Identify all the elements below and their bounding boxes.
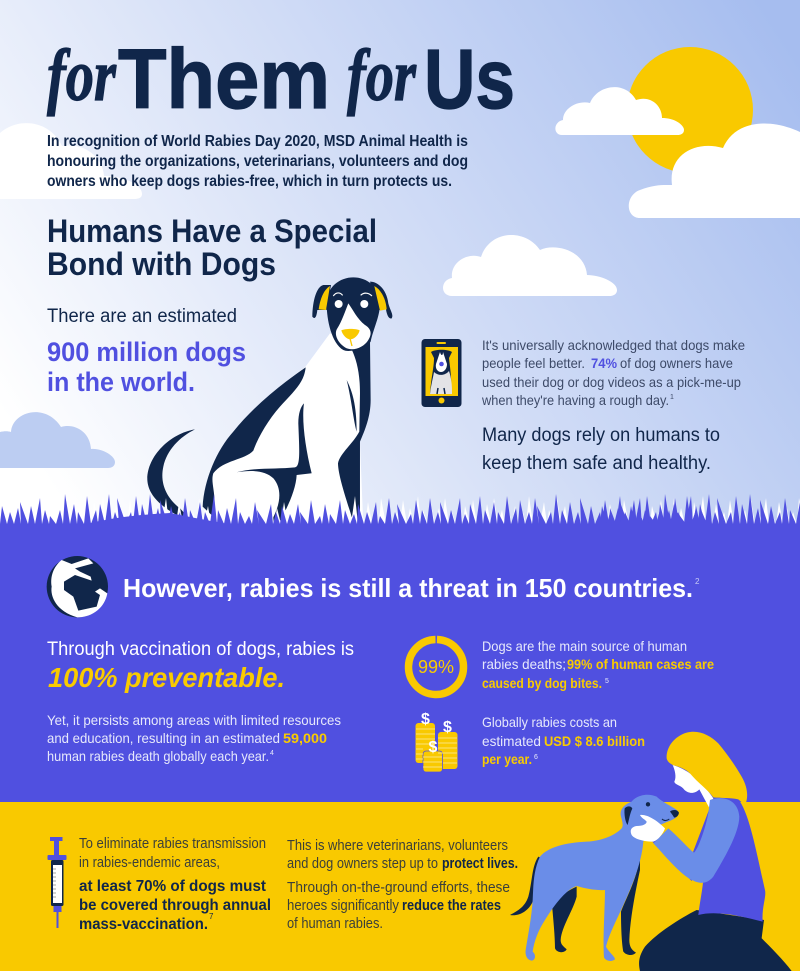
grass: white blades (0, 496, 800, 536)
icon: coins (416, 711, 458, 772)
stat: 900 million dogs: 900 million dogs (47, 337, 246, 367)
woman: legs (639, 910, 792, 971)
text: protect lives: of human rabies. (287, 915, 383, 932)
stat: 900 million dogs (47, 337, 246, 397)
panel: sky background (0, 0, 800, 540)
icon: globe (47, 556, 108, 617)
text: cost (482, 714, 645, 767)
text: protect lives: This is where veterinarians, volunteers (287, 837, 508, 854)
dog: body (526, 795, 678, 961)
dog: far legs (552, 887, 577, 952)
intro text: In recognition of World Rabies Day 2020, MSD Animal Health is (47, 133, 468, 150)
text: dogs make people feel better: It's universally acknowledged that dogs make (482, 337, 745, 353)
title: for (47, 35, 117, 117)
text: protect lives: heroes significantly (287, 897, 399, 914)
text: dogs make people feel better: when they're having a rough day. (481, 392, 669, 408)
intro text (47, 133, 468, 190)
text: eliminate rabies: in rabies-endemic areas, (79, 854, 220, 871)
heading: rabies threat: However, rabies is still a threat in 150 countries. (123, 573, 693, 603)
icon: coins: $ (443, 719, 452, 736)
text: dogs make people feel better: people feel better. (482, 355, 585, 371)
woman: torso (690, 798, 765, 922)
text: cost: USD $ 8.6 billion (544, 733, 645, 749)
text: persists: human rabies death globally each year. (47, 748, 269, 764)
text: protect lives (287, 837, 518, 932)
woman: hand (631, 815, 665, 842)
text: dog bites: 5 (605, 678, 609, 685)
title: for (347, 35, 417, 117)
dog: ear, eye, nose (624, 806, 632, 825)
cloud: large right (629, 124, 800, 218)
stat: 100% preventable: 100% preventable. (48, 662, 285, 693)
text: 70% of dogs (79, 878, 271, 933)
text: dogs make people feel better: 1 (670, 394, 674, 401)
heading: special bond: Humans Have a Special (47, 213, 377, 249)
text: protect lives: Through on-the-ground efforts, these (287, 879, 510, 896)
text: dogs make people feel better (481, 337, 745, 408)
text: persists: and education, resulting in an estimated (47, 730, 280, 746)
woman: hair (667, 732, 747, 805)
icon: coins: $ (429, 739, 438, 756)
illustration: woman and dog (510, 732, 792, 971)
woman: arm (652, 832, 698, 881)
title (47, 32, 515, 126)
heading: rabies threat: 2 (695, 577, 700, 586)
text: cost: 6 (534, 754, 538, 761)
intro text: owners who keep dogs rabies-free, which in turn protects us. (47, 173, 452, 190)
title: Us (424, 32, 515, 126)
text: dog bites: rabies deaths; (482, 656, 566, 672)
text: persists (47, 712, 341, 764)
heading: special bond: Bond with Dogs (47, 246, 276, 282)
icon: sun (627, 47, 753, 173)
title: Them (118, 32, 330, 126)
chart: 99% ring (408, 639, 464, 695)
text: dog bites: caused by dog bites. (482, 675, 602, 691)
cloud: small top right (555, 87, 684, 135)
cloud: upper left (0, 123, 142, 199)
text: persists: 4 (270, 750, 274, 757)
text: dogs make people feel better: 74% (591, 355, 618, 371)
text: dogs rely on humans (482, 425, 720, 474)
heading: special bond (47, 213, 377, 282)
icon: coins: $ (421, 711, 430, 728)
text: vaccination: Through vaccination of dogs, rabies is (47, 639, 354, 660)
text: cost: estimated (482, 733, 541, 749)
chart: 99% ring: 99% (418, 657, 454, 677)
text: protect lives: reduce the rates (402, 897, 501, 914)
panel: purple band (0, 530, 800, 802)
stat: 900 million dogs: in the world. (47, 367, 195, 397)
text: protect lives: and dog owners step up to (287, 855, 438, 872)
intro text: honouring the organizations, veterinarians, volunteers and dog (47, 153, 468, 170)
text: protect lives: protect lives. (442, 855, 518, 872)
cloud: middle (443, 235, 617, 296)
text: estimate: There are an estimated (47, 306, 237, 327)
text: eliminate rabies: To eliminate rabies transmission (79, 835, 266, 852)
cloud: lilac left (0, 412, 115, 468)
illustration: sitting dog (147, 277, 392, 543)
dog: tail (510, 857, 542, 915)
woman: neck and face (673, 765, 713, 807)
icon: phone with dog (422, 339, 462, 407)
text: dog bites (482, 638, 714, 691)
text: 70% of dogs: mass-vaccination. (79, 916, 208, 933)
text: dogs rely on humans: Many dogs rely on humans to (482, 425, 720, 446)
text: 70% of dogs: at least 70% of dogs must (79, 878, 267, 895)
text: dog bites: Dogs are the main source of human (482, 638, 687, 654)
text: dogs make people feel better: of dog owners have (620, 355, 733, 371)
text: cost: per year. (482, 751, 532, 767)
text: 70% of dogs: be covered through annual (79, 897, 271, 914)
text: dogs make people feel better: used their dog or dog videos as a pick-me-up (482, 374, 741, 390)
grass: purple blades (0, 494, 800, 540)
text: dog bites: 99% of human cases are (567, 656, 714, 672)
text: dogs rely on humans: keep them safe and healthy. (482, 453, 711, 474)
text: eliminate rabies (79, 835, 266, 871)
text: persists: 59,000 (283, 730, 327, 746)
panel: yellow band (0, 802, 800, 971)
icon: syringe (48, 837, 66, 928)
text: persists: Yet, it persists among areas with limited resources (47, 712, 341, 728)
text: cost: Globally rabies costs an (482, 714, 617, 730)
text: 70% of dogs: 7 (209, 912, 214, 921)
